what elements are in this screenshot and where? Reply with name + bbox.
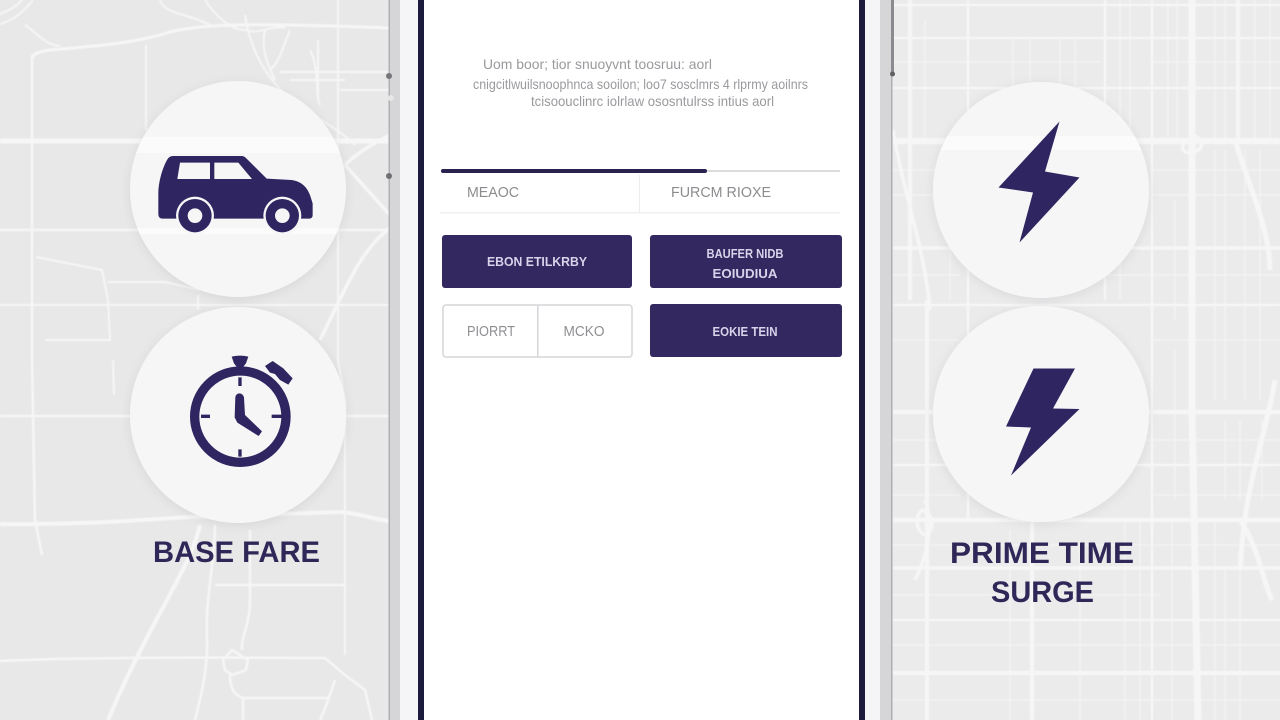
- phone mockup: [386, 0, 895, 720]
- button: primary two: EOIUDIUA: [712, 266, 778, 281]
- tabs: MEAOC: [467, 184, 519, 201]
- intro text block: tcisoouclinrc iolrlaw ososntulrss intius aorl: [531, 93, 774, 109]
- phone screen: [424, 0, 859, 720]
- button: primary two: BAUFER NIDB: [706, 246, 784, 261]
- button: primary three: EOKIE TEIN: [712, 324, 778, 339]
- progress bar: [441, 169, 840, 173]
- right street map background: [893, 0, 1280, 720]
- outlined split button: [443, 305, 632, 357]
- circle: bolt one: [933, 82, 1149, 298]
- outlined split button: PIORRT: [467, 323, 515, 340]
- circle: car: [130, 81, 346, 297]
- label: base fare: BASE FARE: [153, 536, 320, 569]
- left street map background: [0, 0, 390, 720]
- button: primary one: EBON ETILKRBY: [487, 254, 587, 269]
- icon: lightning bolt: [998, 122, 1080, 242]
- circle: stopwatch: [130, 307, 346, 523]
- icon: stopwatch: [195, 356, 293, 462]
- tabs: FURCM RIOXE: [671, 184, 771, 201]
- circle: bolt two: [933, 306, 1149, 522]
- label: prime time surge: PRIME TIME: [950, 537, 1134, 570]
- button: primary two: [650, 235, 842, 288]
- icon: lightning bolt: [1006, 368, 1080, 476]
- button: primary one: [442, 235, 632, 288]
- intro text block: Uom boor; tior snuoyvnt toosruu: aorl: [483, 56, 712, 72]
- button: primary three: [650, 304, 842, 357]
- outlined split button: MCKO: [564, 323, 604, 340]
- intro text block: [473, 56, 808, 109]
- phone frame left edge: [386, 0, 424, 720]
- intro text block: cnigcitlwuilsnoophnca sooilon; loo7 sosclmrs 4 rlprmy aoilnrs: [473, 76, 808, 92]
- label: prime time surge: SURGE: [991, 576, 1094, 609]
- icon: car: [158, 156, 313, 235]
- phone frame right edge: [859, 0, 895, 720]
- tabs: [440, 175, 840, 214]
- label: prime time surge: [950, 537, 1134, 609]
